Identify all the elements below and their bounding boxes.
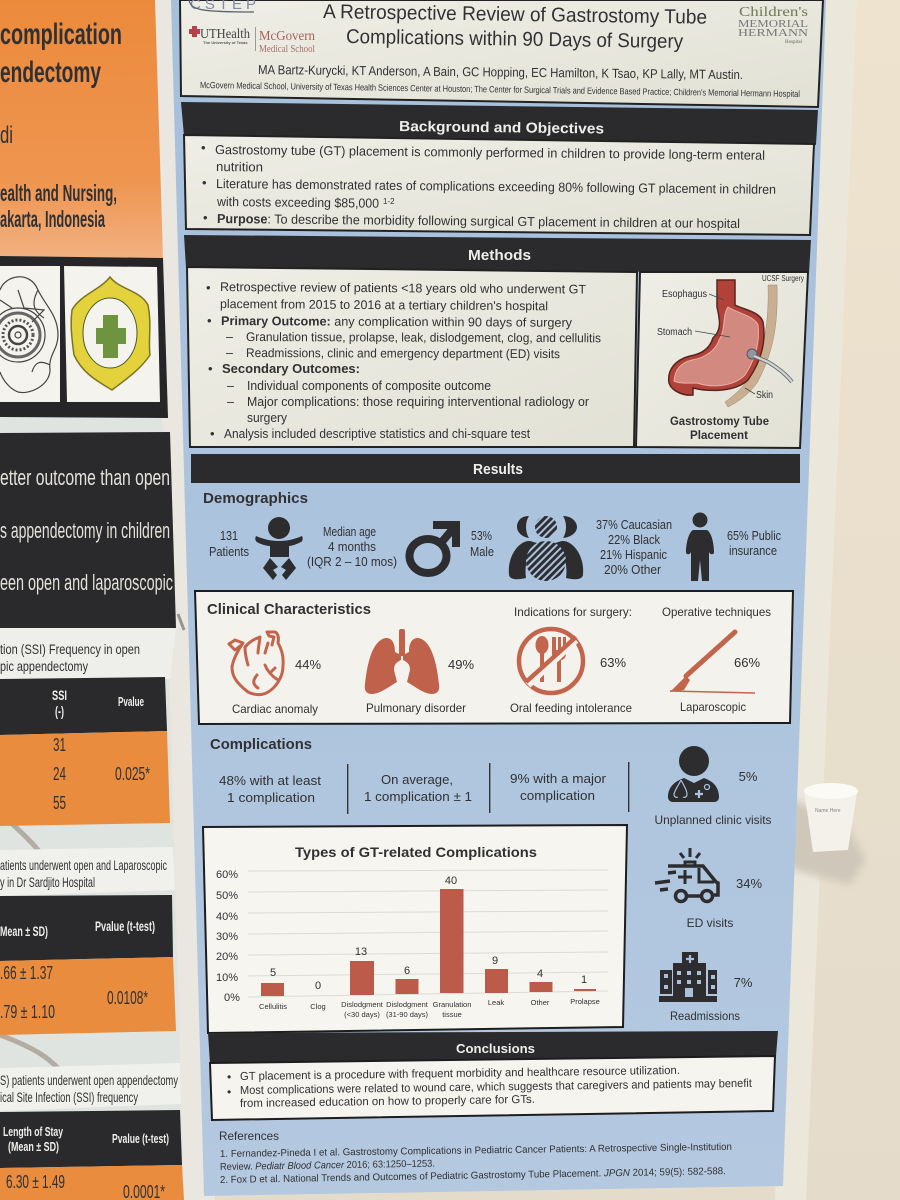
bar values: 6 [404, 965, 410, 977]
stat: median age: 4 months [328, 540, 376, 554]
section: demographics [203, 490, 781, 581]
references [219, 1129, 732, 1186]
left poster table 2: .66 ± 1.37 [0, 963, 53, 983]
methods text box: – [227, 379, 234, 393]
gastrostomy illustration panel: Stomach [657, 327, 692, 338]
left poster table 3: Length of Stay [3, 1124, 64, 1139]
logo: Children's Memorial Hermann: MEMORIAL [738, 18, 808, 30]
left poster orange title block: di [0, 122, 13, 149]
stat: 7%: 7% [734, 975, 753, 990]
label: operative techniques: Operative techniques [662, 605, 771, 619]
left poster table 3: 6.30 ± 1.49 [6, 1172, 65, 1192]
axis labels: 60% [216, 869, 238, 881]
caption: readmissions: Readmissions [670, 1009, 740, 1023]
left poster conclusions block: een open and laparoscopic [0, 570, 173, 595]
methods text box: Analysis included descriptive statistics and chi-square test [224, 427, 531, 441]
gastrostomy illustration panel: Esophagus [662, 289, 707, 300]
axis labels: 50% [216, 890, 238, 902]
bullet box: Most complications were related to wound care, which suggests that caregivers and patients may benefit [240, 1078, 753, 1097]
bar values [270, 875, 587, 992]
references: References [219, 1129, 279, 1143]
logo: UTHealth McGovern [189, 26, 315, 55]
left poster table 1: 0.025* [115, 764, 150, 784]
bullet box: Purpose: To describe the morbidity following surgical GT placement in children at our hospital [217, 211, 740, 231]
bar values: 1 [581, 974, 587, 986]
left poster table 2: Mean ± SD) [0, 923, 48, 939]
stat: 5%: 5% [739, 769, 758, 784]
bullet box: nutrition [216, 159, 263, 174]
icon: scalpel [670, 632, 755, 693]
icon: heart [229, 632, 283, 695]
header bar: Background and Objectives [399, 119, 604, 138]
main poster blue sheet [171, 0, 826, 1196]
paper cup with shadow [768, 783, 866, 885]
left poster table 1 [0, 628, 176, 826]
stat: public insurance [727, 529, 781, 558]
methods text box [187, 267, 637, 447]
left poster logo band [0, 256, 168, 418]
left poster table 1: tion (SSI) Frequency in open [0, 641, 140, 657]
logo: UTHealth McGovern: The University of Texas [203, 40, 248, 45]
methods text box: Granulation tissue, prolapse, leak, dislodgement, clog, and cellulitis [246, 330, 601, 345]
stat: at least one complication: 48% with at least [219, 773, 321, 788]
left poster table 3: (Mean ± SD) [8, 1139, 59, 1154]
chart title: Types of GT-related Complications [295, 844, 537, 860]
logo: UTHealth McGovern: Medical School [259, 43, 315, 55]
methods text box: – [226, 330, 233, 344]
results header bar: Results [473, 462, 523, 478]
category labels [259, 997, 600, 1019]
gastrostomy illustration panel: Skin [756, 390, 773, 401]
left poster table 1: pic appendectomy [0, 658, 88, 674]
header bar: Conclusions [456, 1041, 535, 1056]
gastrostomy illustration panel: UCSF Surgery [762, 274, 804, 283]
stat: race: 37% Caucasian [596, 518, 672, 532]
panel: types of GT-related complications chart [203, 825, 627, 1033]
methods text box: surgery [247, 411, 288, 425]
stat: race [596, 518, 672, 577]
section: complications [210, 736, 629, 814]
icon: ambulance [655, 848, 718, 902]
methods text box: Major complications: those requiring interventional radiology or [247, 395, 589, 409]
stat: patients: Patients [209, 545, 249, 559]
left poster orange title block: ealth and Nursing, [0, 180, 117, 206]
stat: patients [209, 529, 249, 559]
stat: major complication [510, 771, 607, 803]
methods text box: Individual components of composite outcome [247, 379, 491, 393]
stat: average complications: 1 complication ± 1 [364, 789, 472, 804]
axis labels: 0% [224, 992, 240, 1004]
category labels: Leak [488, 998, 504, 1007]
left poster orange title block: akarta, Indonesia [0, 206, 105, 232]
methods text box: Secondary Outcomes: [222, 362, 360, 376]
title text: Complications within 90 Days of Surgery [346, 26, 683, 53]
left poster table 2 [0, 847, 176, 1035]
left poster table 3: S) patients underwent open appendectomy [0, 1072, 178, 1088]
paper cup with shadow: Name Here [815, 808, 841, 814]
stat: major complication: complication [520, 788, 595, 803]
left poster orange title block [0, 0, 163, 258]
category labels: Granulation [433, 1000, 471, 1009]
bar values: 5 [270, 967, 276, 979]
caption: unplanned clinic visits: Unplanned clinic visits [654, 813, 772, 827]
methods text box: Readmissions, clinic and emergency department (ED) visits [246, 346, 560, 361]
left poster table 2: atients underwent open and Laparoscopic [0, 857, 167, 873]
stat: public insurance: insurance [729, 544, 777, 558]
logo: UTHealth McGovern: UTHealth [200, 27, 250, 42]
stat: patients: 131 [220, 529, 238, 543]
methods text box: • [208, 361, 213, 376]
axis labels: 30% [216, 931, 238, 943]
caption: laparoscopic: Laparoscopic [680, 700, 746, 714]
bullet box: • [227, 1085, 231, 1099]
bars [261, 889, 596, 996]
left poster table 1: 55 [53, 793, 66, 813]
axis labels: 20% [216, 951, 238, 963]
axis labels: 40% [216, 911, 238, 923]
left poster table 1: Pvalue [118, 694, 144, 709]
stat: race: 21% Hispanic [600, 548, 667, 562]
left poster table 2: .79 ± 1.10 [0, 1002, 55, 1022]
column: resource utilization [654, 746, 772, 1023]
category labels: tissue [442, 1010, 462, 1019]
methods text box: Primary Outcome: any complication within 90 days of surgery [221, 314, 573, 330]
title text: A Retrospective Review of Gastrostomy Tube [323, 1, 707, 29]
heading: Complications [210, 736, 312, 753]
bullet box: • [202, 175, 207, 190]
category labels: (31-90 days) [386, 1010, 429, 1019]
category labels: Cellulitis [259, 1002, 287, 1011]
logo: Children's Memorial Hermann [738, 5, 808, 45]
methods text box: • [207, 313, 212, 328]
left poster table 3: ical Site Infection (SSI) frequency [0, 1089, 138, 1105]
left poster table 1: SSI [52, 687, 67, 703]
references: 2. Fox D et al. National Trends and Outcomes of Pediatric Gastrostomy Tube Placement. JPGN 2014; 59(5): 582-588. [220, 1166, 726, 1186]
category labels: Dislodgment [386, 1000, 429, 1009]
wall panel strip [775, 0, 857, 1200]
stat: 44%: 44% [295, 657, 321, 672]
left poster table 3 [0, 1063, 184, 1200]
left poster orange title block: endectomy [0, 56, 101, 89]
axis labels [216, 869, 240, 1004]
header bar [181, 102, 818, 145]
panel: clinical characteristics [195, 591, 793, 724]
left poster conclusions block: etter outcome than open [0, 465, 170, 490]
title panel [180, 0, 823, 107]
heading: Demographics [203, 490, 308, 507]
axis labels: 10% [216, 972, 238, 984]
label: indications: Indications for surgery: [514, 605, 632, 619]
left poster orange title block: complication [0, 18, 122, 51]
stat: at least one complication [219, 773, 321, 805]
icon: person [686, 512, 714, 581]
references: Review. Pediatr Blood Cancer 2016; 63:1250–1253. [220, 1159, 435, 1173]
bar values: 9 [492, 955, 498, 967]
authors: MA Bartz-Kurycki, KT Anderson, A Bain, GC Hopping, EC Hamilton, K Tsao, KP Lally, MT Austin. [258, 62, 743, 82]
bullet box: Literature has demonstrated rates of complications exceeding 80% following GT placement in children [216, 176, 776, 197]
category labels: Prolapse [570, 997, 600, 1006]
methods text box: – [227, 395, 234, 409]
stat: race: 20% Other [604, 563, 661, 577]
bullet box: • [227, 1070, 231, 1084]
bullet box: • [201, 140, 206, 155]
header bar: Methods [468, 248, 531, 264]
bullet box [184, 135, 814, 235]
stat: major complication: 9% with a major [510, 771, 607, 786]
bullet box: Gastrostomy tube (GT) placement is commonly performed in children to provide long-term enteral [215, 142, 765, 163]
bullet box [210, 1056, 775, 1120]
stat: 34%: 34% [736, 876, 762, 891]
category labels: Clog [310, 1002, 326, 1011]
results header bar [191, 454, 800, 483]
stat: at least one complication: 1 complication [227, 790, 315, 805]
panel: methods [184, 235, 811, 448]
title text [323, 1, 707, 53]
header bar [184, 235, 811, 273]
gastrostomy illustration panel: Gastrostomy Tube [670, 414, 769, 428]
bullet box: GT placement is a procedure with frequent morbidity and healthcare resource utilization. [240, 1065, 680, 1083]
logo: UTHealth McGovern: McGovern [259, 29, 315, 44]
stat: 49%: 49% [448, 657, 474, 672]
methods text box: placement from 2015 to 2016 at a tertiary children's hospital [220, 297, 548, 313]
caption: ED visits: ED visits [687, 916, 733, 930]
stat: average complications: On average, [381, 772, 453, 787]
panel: background and objectives [181, 102, 818, 235]
methods text box: • [206, 280, 211, 295]
left poster table 1: 24 [53, 764, 66, 784]
stat: male: Male [470, 545, 494, 559]
bar values: 4 [537, 968, 543, 980]
stat: median age [307, 525, 397, 569]
bullet box: 1-2 [383, 197, 395, 206]
icon: group of people [509, 516, 583, 581]
logo: university rosette [0, 277, 58, 393]
icon: baby [255, 517, 303, 580]
gastrostomy illustration panel [636, 272, 808, 448]
bar values: 0 [315, 980, 321, 992]
caption: pulmonary disorder: Pulmonary disorder [366, 701, 466, 715]
bar values: 40 [445, 875, 457, 887]
gastrostomy illustration panel: Placement [690, 428, 748, 442]
left poster table 2: 0.0108* [107, 988, 148, 1008]
stat: male: 53% [471, 529, 492, 543]
logo: health department shield [71, 277, 150, 390]
logo: Children's Memorial Hermann: Hospital [785, 40, 803, 45]
references: 1. Fernandez-Pineda I et al. Gastrostomy Complications in Pediatric Cancer Patients: A Retrospective Single-Institution [220, 1142, 732, 1160]
bullet box: with costs exceeding $85,000 [216, 194, 379, 211]
stat: public insurance: 65% Public [727, 529, 781, 543]
category labels: Dislodgment [341, 1000, 384, 1009]
logo: Children's Memorial Hermann: Children's [739, 5, 808, 20]
stat: median age: (IQR 2 – 10 mos) [307, 555, 397, 569]
bullet box: • [203, 210, 208, 225]
stat: male [470, 529, 494, 559]
caption: cardiac anomaly: Cardiac anomaly [232, 702, 318, 716]
left poster table 1: 31 [53, 735, 66, 755]
icon: lungs [365, 629, 439, 694]
bar values: 13 [355, 946, 367, 958]
icon: male symbol [410, 525, 456, 573]
stat: median age: Median age [323, 525, 376, 539]
left neighbouring poster [0, 0, 215, 1200]
logo: Children's Memorial Hermann: HERMANN [738, 27, 808, 39]
bullet box: from increased education on how to properly care for GTs. [240, 1094, 535, 1110]
stat: 63%: 63% [600, 655, 626, 670]
methods text box: Retrospective review of patients <18 years old who underwent GT [220, 280, 586, 297]
category labels: Other [531, 998, 550, 1007]
left poster conclusions block: s appendectomy in children [0, 518, 170, 543]
left poster table 3: Pvalue (t-test) [112, 1131, 169, 1146]
stat: 66%: 66% [734, 655, 760, 670]
header bar [208, 1031, 778, 1064]
icon: hospital [659, 952, 717, 1002]
methods text box: • [210, 426, 215, 441]
heading: Clinical Characteristics [207, 601, 371, 618]
category labels: (<30 days) [344, 1010, 380, 1019]
left poster table 1: (-) [55, 703, 64, 719]
caption: oral feeding intolerance: Oral feeding intolerance [510, 701, 632, 715]
stat: average complications [364, 772, 472, 804]
icon: stomach diagram [669, 280, 792, 407]
stat: race: 22% Black [608, 533, 661, 547]
icon: no food [519, 629, 583, 693]
left poster table 2: Pvalue (t-test) [95, 918, 155, 934]
panel: conclusions [208, 1031, 778, 1120]
methods text box: – [226, 346, 233, 360]
left poster table 2: y in Dr Sardjito Hospital [0, 874, 95, 890]
icon: doctor [668, 746, 719, 802]
left poster conclusions block [0, 432, 176, 628]
